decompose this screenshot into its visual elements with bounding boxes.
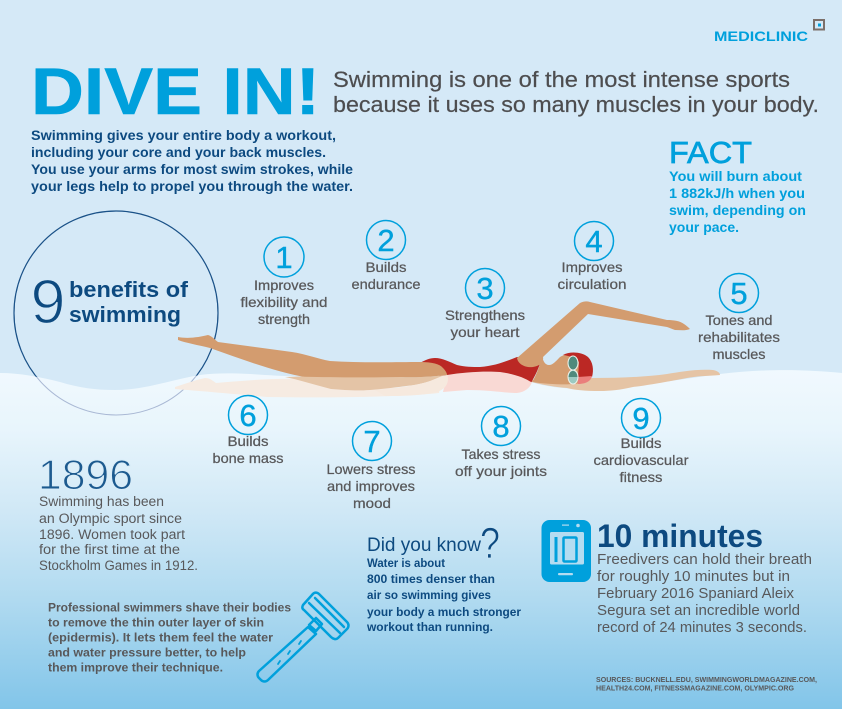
illustration: swimmer [175,301,720,397]
fact callout: your pace. [669,220,739,235]
benefit 5: muscles [712,346,766,362]
benefit 9: Builds [620,435,662,451]
near leg [178,335,447,380]
benefit 7: Lowers stress [326,461,416,477]
far leg under water [175,378,440,397]
subtitle [333,67,819,117]
benefit 1: Improves [254,277,314,293]
10 minutes text: February 2016 Spaniard Aleix [597,586,795,602]
benefit 2: 2 [377,223,395,258]
submerged near leg [285,375,447,390]
icon: razor [258,593,348,682]
submerged hip [375,374,448,396]
benefit 8: Takes stress [462,446,540,462]
benefit 4 [558,222,626,292]
subtitle: Swimming is one of the most intense sports [333,67,790,92]
head and neck [532,353,592,384]
goggles [568,356,578,370]
benefit 5: 5 [730,276,748,311]
submerged torso [443,372,532,393]
logo: Mediclinic: MEDICLINIC [714,28,808,44]
did you know: Water is about [367,558,445,570]
intro text: including your core and your back muscles. [31,145,326,160]
swim cap [563,353,593,378]
benefit 1: flexibility and [240,294,328,310]
fact callout: FACT [669,135,752,170]
did you know: workout than running. [366,622,493,634]
did you know: Did you know [367,535,481,556]
1896 text: for the first time at the [39,542,180,557]
intro text: You use your arms for most swim strokes, while [31,162,354,177]
benefit 7: mood [353,495,391,511]
benefit 6: 6 [239,398,257,433]
logo: Mediclinic [714,20,824,44]
fact callout: swim, depending on [669,203,806,218]
far arm under water [532,370,720,391]
benefit 9 [594,398,689,485]
1896 text: 1896. Women took part [39,527,185,542]
sources [596,675,817,692]
benefit 5 [698,274,780,362]
benefit 3: Strengthens [445,307,525,323]
10 minutes heading: 10 minutes [597,518,763,554]
shaving text: and water pressure better, to help [48,646,246,660]
heading: 9 benefits of swimming: 9 [30,268,66,337]
1896 heading: 1896 [38,451,133,498]
10 minutes text: Segura set an incredible world [597,603,800,619]
1896 text [39,494,198,573]
subtitle: because it uses so many muscles in your body. [333,92,819,117]
benefit 4: circulation [558,276,626,292]
shaving text [48,600,291,674]
sources: SOURCES: BUCKNELL.EDU, SWIMMINGWORLDMAGAZINE.COM, [596,675,817,684]
shaving text: Professional swimmers shave their bodies [48,600,291,614]
shaving text: to remove the thin outer layer of skin [48,616,264,630]
1896 text: Stockholm Games in 1912. [39,558,198,573]
raised arm [517,301,690,367]
heading: 9 benefits of swimming: benefits of [69,277,189,302]
title: DIVE IN! [31,54,320,128]
10 minutes text: record of 24 minutes 3 seconds. [597,620,807,636]
benefit 1: strength [258,311,310,327]
intro text [31,128,354,194]
shaving text: them improve their technique. [48,660,223,674]
fact callout: You will burn about [669,169,803,184]
benefit 7: 7 [363,424,381,459]
did you know: ? [480,519,500,568]
benefit 6: Builds [228,433,268,449]
big circle outline [14,211,218,415]
heading: 9 benefits of swimming: swimming [69,302,181,327]
intro text: Swimming gives your entire body a workout, [31,128,336,143]
10 minutes text: Freedivers can hold their breath [597,552,812,568]
1896 text: Swimming has been [39,494,164,509]
shaving text: (epidermis). It lets them feel the water [48,630,273,644]
benefit 4: Improves [562,259,622,275]
benefit 2: endurance [352,276,421,292]
benefit 7 [326,422,416,511]
sources: HEALTH24.COM, FITNESSMAGAZINE.COM, OLYMPIC.ORG [596,684,794,692]
benefit 9: 9 [632,401,650,436]
benefit 3: 3 [476,271,494,306]
benefit 8: off your joints [455,463,547,479]
10 minutes text [597,552,812,636]
10 minutes text: for roughly 10 minutes but in [597,569,790,585]
benefit 6 [212,396,284,466]
heading: 9 benefits of swimming [30,268,189,337]
water [0,370,842,709]
did you know: 800 times denser than [367,574,495,586]
swimsuit [420,357,541,383]
benefit 1: 1 [275,240,293,275]
cap under water [578,376,592,384]
benefit 9: cardiovascular [594,452,689,468]
benefit 9: fitness [620,469,662,485]
did you know [366,519,522,634]
did you know: air so swimming gives [367,590,491,602]
benefit 6: bone mass [212,450,284,466]
benefit 8 [455,406,547,479]
benefit 5: rehabilitates [698,329,780,345]
benefit 1 [240,237,328,327]
benefit 8: 8 [492,409,510,444]
benefit 3: your heart [450,324,520,340]
fact callout: 1 882kJ/h when you [669,186,805,201]
icon: stopwatch display [542,520,591,582]
did you know: your body a much stronger [367,607,522,619]
benefit 5: Tones and [706,312,772,328]
benefit 2: Builds [366,259,406,275]
benefit 7: and improves [327,478,415,494]
benefit 2 [352,220,421,292]
benefit 3 [445,268,525,340]
benefit 4: 4 [585,224,603,259]
1896 text: an Olympic sport since [39,511,182,526]
fact callout [669,135,806,235]
intro text: your legs help to propel you through the water. [31,179,353,194]
